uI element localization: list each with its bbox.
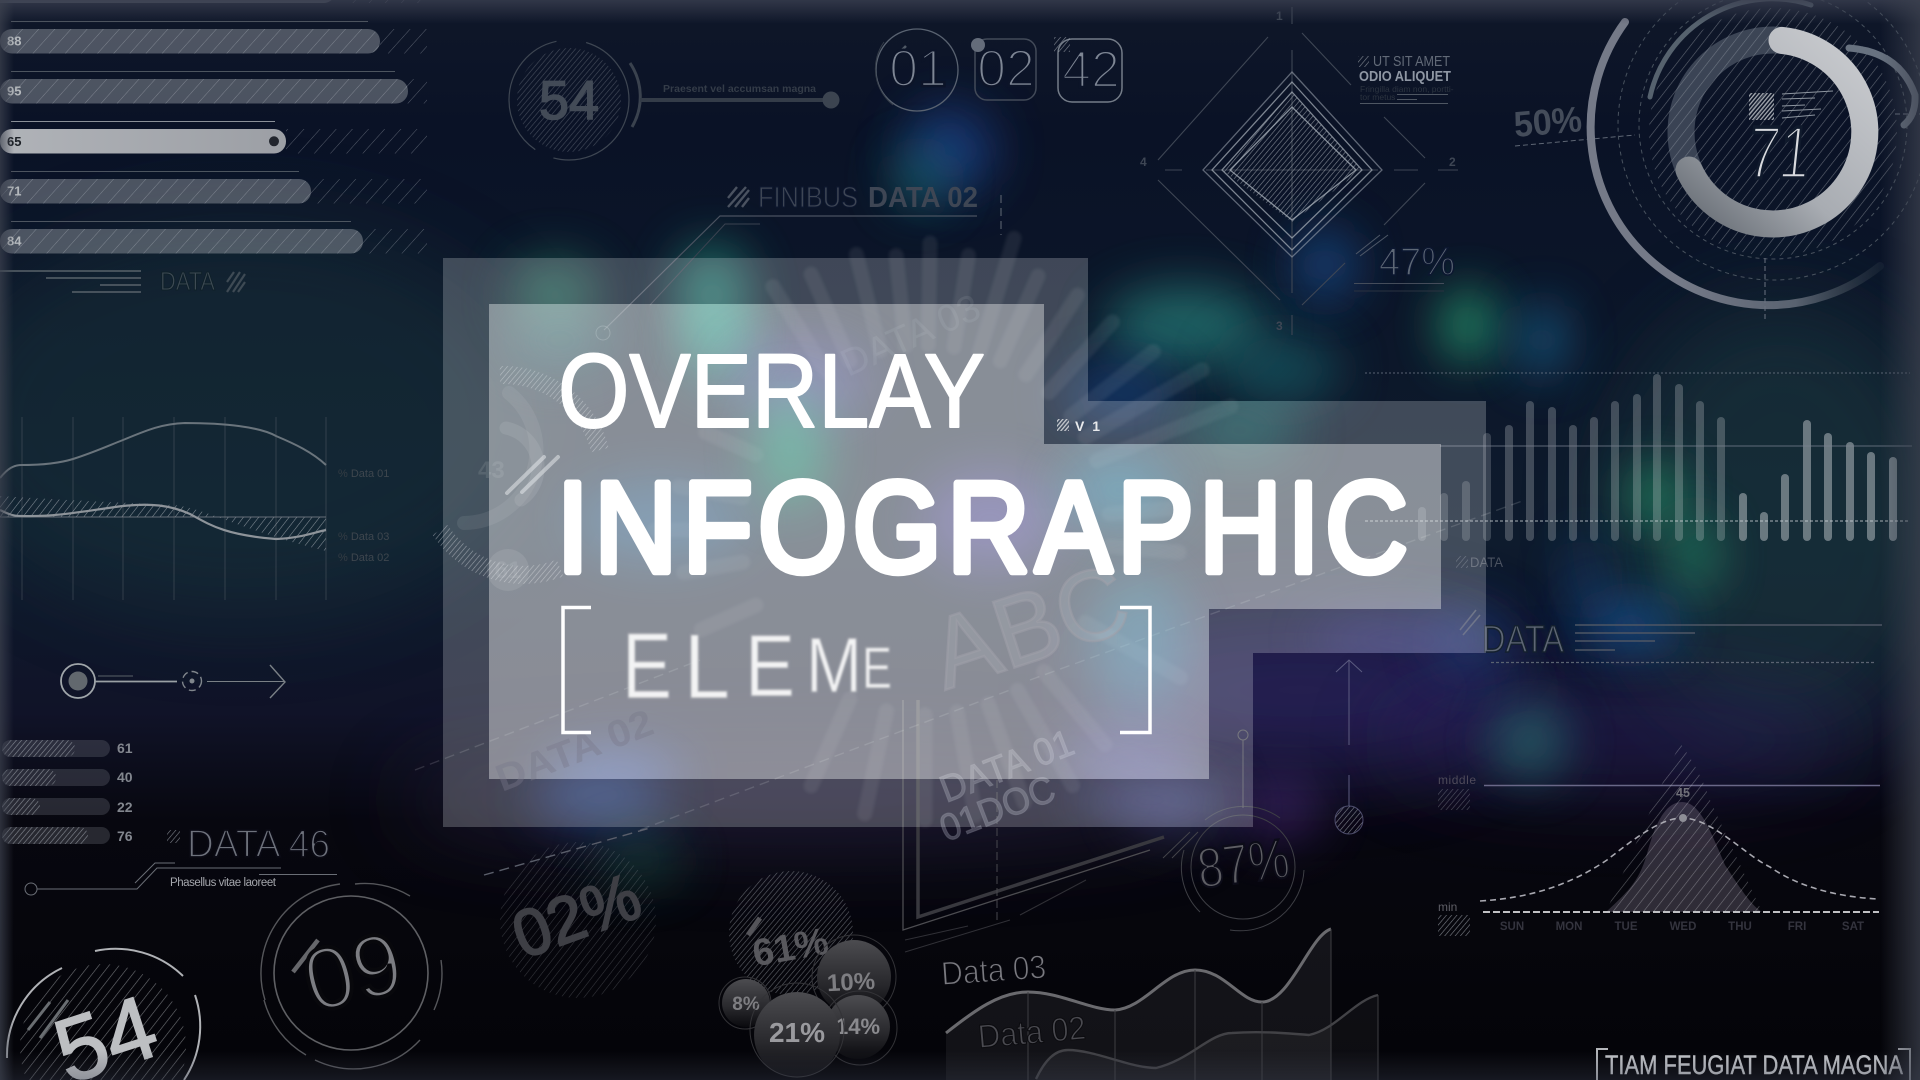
legend min: min <box>1438 900 1457 914</box>
bubble 10%: 10% <box>826 968 876 997</box>
weekday labels: WED <box>1670 921 1696 933</box>
number badge 01: 01 <box>889 40 947 98</box>
bubble 8% <box>719 977 771 1029</box>
legend middle <box>1438 773 1476 810</box>
distribution chart: 45 <box>1676 786 1690 800</box>
gauge dashed rings <box>1618 0 1920 280</box>
faint data 02 label: DATA 02 <box>490 702 659 800</box>
text: ut sit amet: Fringilla diam non, portti- <box>1360 84 1454 94</box>
weekday labels: THU <box>1728 921 1752 933</box>
small progress bars: 76 <box>117 828 133 844</box>
heading: data right: DATA <box>1482 619 1565 661</box>
radar axis labels: 4 <box>1140 155 1147 169</box>
dashed curve <box>1480 818 1878 901</box>
subtitle: animating letters: E <box>622 613 672 718</box>
bubble 21% <box>750 983 844 1078</box>
small progress bars: 22 <box>117 799 133 815</box>
praesent slider: Praesent vel accumsan magna <box>663 83 816 95</box>
number badge 42: 42 <box>1062 41 1120 99</box>
equalizer bar chart <box>1365 373 1912 570</box>
text: data 01 01doc: DATA 01 <box>934 722 1080 811</box>
subtitle: animating letters: E <box>745 616 795 715</box>
radar axis labels: 2 <box>1449 155 1456 169</box>
heading: finibus data 02 <box>596 182 1001 340</box>
gauge outer arc <box>1591 22 1880 305</box>
stat 50%: 50% <box>1512 98 1583 145</box>
bar 88 <box>0 22 427 54</box>
bar 88: 88 <box>7 34 21 48</box>
gauge icon lines <box>1749 91 1833 120</box>
small progress bars: 61 <box>117 740 133 756</box>
series data 02 hatched <box>0 496 326 551</box>
weekday labels: SAT <box>1842 921 1864 933</box>
legend min <box>1438 900 1470 936</box>
gauge 54 top: 54 <box>539 69 599 131</box>
number badge 02: 02 <box>977 40 1035 98</box>
subtitle: animating letters: E <box>862 636 892 701</box>
subtitle: animating letters: L <box>684 616 730 718</box>
stat 02% <box>484 828 656 998</box>
heading: data 46: Phasellus vitae laoreet <box>170 877 277 889</box>
faint circle 61: 61 <box>495 557 521 584</box>
bar 65 highlighted <box>0 122 427 154</box>
top partial bar <box>0 0 427 3</box>
label data 03: Data 03 <box>940 948 1047 992</box>
area chart <box>940 929 1378 1080</box>
text: data 01 01doc: 01DOC <box>934 768 1061 850</box>
gauge number: 71 <box>1744 111 1815 194</box>
double slash mark <box>507 457 558 493</box>
heading: data 46: DATA 46 <box>187 823 330 866</box>
text: ut sit amet: ODIO ALIQUET <box>1359 69 1451 85</box>
bar 95 <box>0 72 427 104</box>
bar 71 <box>0 172 427 204</box>
label data 02: Data 02 <box>976 1009 1087 1055</box>
gauge 54 bottom left <box>7 949 200 1080</box>
radar chart <box>1140 7 1458 335</box>
praesent slider <box>640 83 840 108</box>
heading: data 46 <box>25 823 337 895</box>
radar axis labels: 1 <box>1276 9 1283 23</box>
version label: V 1 <box>1075 418 1100 434</box>
subtitle: animating letters: M <box>806 621 862 709</box>
perspective frame <box>903 700 1164 952</box>
radar axis labels: 3 <box>1276 319 1283 333</box>
panel: outer translucent shape <box>443 258 1486 827</box>
series data 03 <box>0 505 326 539</box>
text: ut sit amet <box>1358 54 1454 104</box>
faint text data 03: DATA 03 <box>835 287 987 385</box>
bubble 61% <box>729 871 853 995</box>
bubble 8%: 8% <box>732 994 760 1015</box>
weekday labels: TUE <box>1614 921 1638 933</box>
small progress bars <box>2 740 133 844</box>
gauge upper arc <box>1650 0 1811 97</box>
stat 87% with pin: 87% <box>1194 826 1293 900</box>
gauge 09 <box>261 884 442 1069</box>
inner panel tinted glows <box>543 304 1198 779</box>
panel: inner translucent shape <box>489 304 1441 779</box>
title: infographic: INFOGRAPHIC <box>557 455 1414 599</box>
bracket right <box>1120 608 1150 732</box>
stat 47% <box>1354 235 1455 291</box>
small progress bars: 40 <box>117 769 133 785</box>
subtitle: animating letters <box>622 613 892 718</box>
stat 87% with pin <box>1163 730 1304 931</box>
bar 71: 71 <box>7 184 21 198</box>
heading: finibus data 02: FINIBUS <box>758 182 858 214</box>
faint dashed diagonals <box>415 500 1525 830</box>
stat 50% <box>1512 98 1635 146</box>
faint abc letters: ABC <box>917 543 1142 711</box>
faint gauge behind title <box>440 375 600 575</box>
bar 65 highlighted: 65 <box>7 134 21 149</box>
background glows <box>0 108 1920 884</box>
distribution chart <box>1438 743 1880 936</box>
radar axis labels <box>1140 9 1456 333</box>
equalizer bar chart: DATA <box>1470 554 1504 570</box>
series data 01 <box>0 423 326 478</box>
bubble 10% <box>812 935 896 1019</box>
stat 02%: 02% <box>503 858 650 972</box>
chart legend <box>338 468 389 564</box>
bar 84: 84 <box>7 234 22 248</box>
arrow with pin <box>1335 660 1363 834</box>
text: ut sit amet: tor metus <box>1360 92 1395 102</box>
legend middle: middle <box>1438 773 1476 787</box>
chart legend: % Data 01 <box>338 468 389 480</box>
slider with arrow <box>61 664 285 698</box>
data label with lines <box>0 266 245 296</box>
bubble 61%: 61% <box>749 921 832 975</box>
text: ut sit amet: UT SIT AMET <box>1373 54 1450 70</box>
line chart <box>0 417 389 600</box>
hatched triangle <box>1606 743 1762 912</box>
bar 84 <box>0 222 427 254</box>
hump <box>1606 802 1762 912</box>
gauge right arc <box>1849 48 1915 125</box>
bracket left <box>563 608 591 732</box>
gauge dim ring <box>1681 40 1865 224</box>
stat 47%: 47% <box>1379 241 1455 284</box>
faint text 43: 43 <box>478 457 505 484</box>
data label with lines: DATA <box>160 266 216 296</box>
weekday labels <box>1500 921 1864 933</box>
bubble 14% <box>823 991 897 1065</box>
title: overlay: OVERLAY <box>558 333 985 450</box>
outer panel tinted glows <box>1070 394 1490 820</box>
version label <box>1057 418 1100 434</box>
gauge 09: 09 <box>294 912 413 1031</box>
weekday labels: FRI <box>1788 921 1806 933</box>
heading: data right <box>1460 610 1882 662</box>
panel: horizontal progress bars <box>0 22 427 254</box>
chart legend: % Data 02 <box>338 552 389 564</box>
radial fan bars <box>655 238 1231 820</box>
gauge progress ring <box>1689 40 1865 224</box>
gauge hatched disc <box>1649 8 1897 256</box>
bar 95: 95 <box>7 84 21 98</box>
faint circle 61 <box>487 549 529 591</box>
text: data 01 01doc <box>934 722 1080 850</box>
big circular gauge 71 <box>1591 0 1920 322</box>
number badge 01 <box>875 29 958 111</box>
weekday labels: SUN <box>1500 921 1524 933</box>
bubble 14%: 14% <box>836 1014 880 1039</box>
bubble chart <box>719 871 897 1078</box>
chart legend: % Data 03 <box>338 531 389 543</box>
heading: finibus data 02: DATA 02 <box>868 182 978 214</box>
weekday labels: MON <box>1556 921 1582 933</box>
gauge 54 top <box>509 40 640 160</box>
radar frame <box>1158 7 1458 335</box>
bubble 21%: 21% <box>769 1017 825 1048</box>
